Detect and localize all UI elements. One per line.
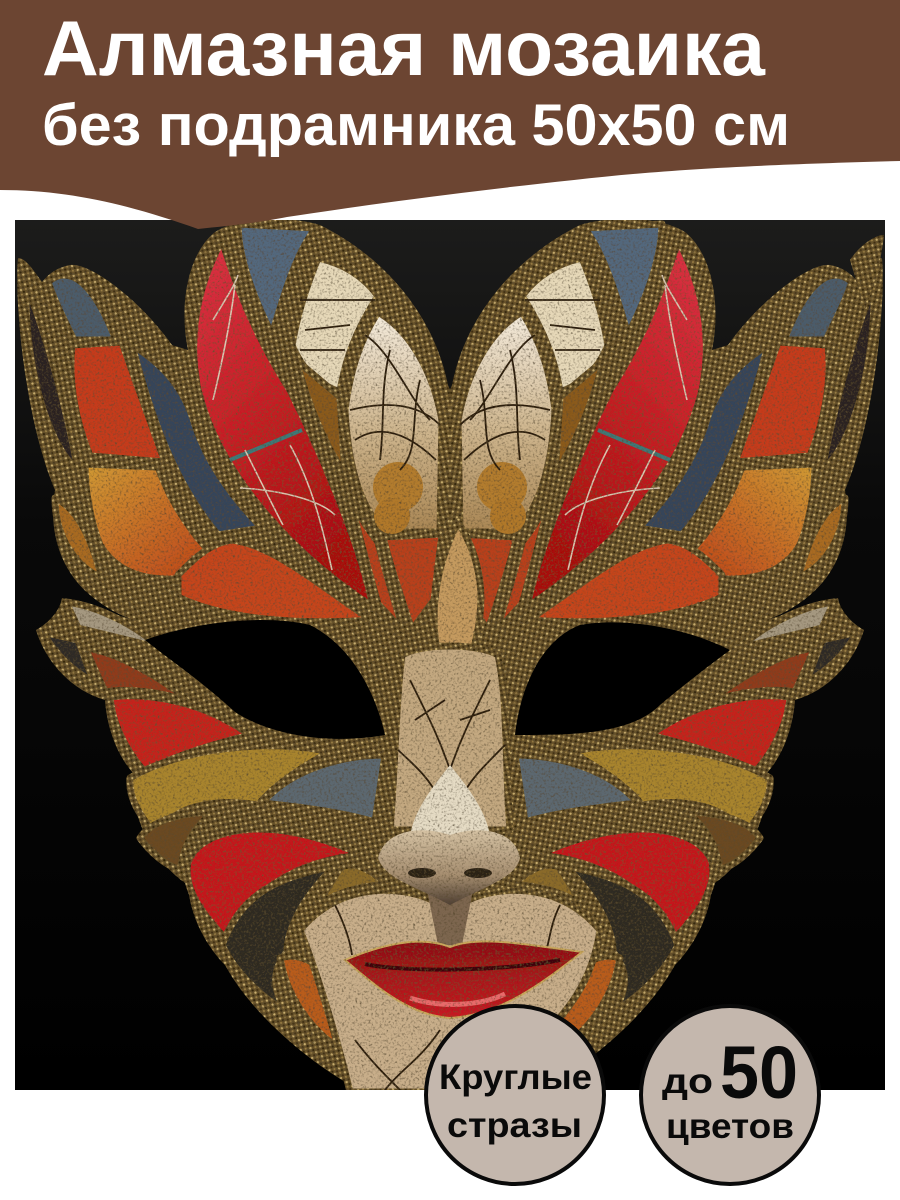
badge: round rhinestones: Круглые	[439, 1058, 592, 1097]
badge: up to 50 colours: 50	[720, 1031, 798, 1114]
badge: up to 50 colours: цветов	[666, 1107, 794, 1146]
product photo: carnival mask on black	[15, 219, 885, 1092]
badge: up to 50 colours	[641, 1006, 819, 1184]
badge: round rhinestones	[426, 1006, 604, 1184]
title: Алмазная мозаика	[42, 4, 766, 92]
subtitle: без подрамника 50х50 см	[42, 93, 790, 158]
badge: up to 50 colours: до	[662, 1062, 713, 1101]
badge: round rhinestones: стразы	[447, 1106, 582, 1145]
header banner	[0, 0, 900, 229]
